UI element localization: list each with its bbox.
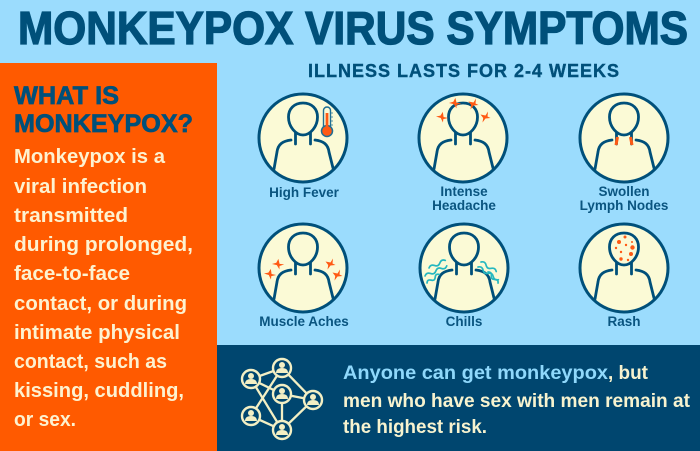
symptom: rash: Rash xyxy=(607,314,641,329)
panel: what is monkeypox xyxy=(0,63,217,451)
panel body text: viral infection xyxy=(14,176,147,198)
panel body text: contact, or during xyxy=(14,293,187,315)
symptom: intense headache: Intense xyxy=(440,184,488,199)
callout text: , but xyxy=(608,363,649,384)
symptom: swollen lymph nodes: Swollen xyxy=(598,184,650,199)
panel body text: during prolonged, xyxy=(14,234,193,256)
panel: risk callout xyxy=(217,345,700,451)
callout text: the highest risk. xyxy=(343,417,487,438)
icon: ache bolts xyxy=(263,258,342,281)
callout text: men who have sex with men remain at xyxy=(343,391,691,412)
symptom: muscle aches: Muscle Aches xyxy=(259,314,349,329)
panel body text: face-to-face xyxy=(14,263,130,285)
panel body text: contact, such as xyxy=(14,351,167,373)
icon: thermometer xyxy=(322,107,333,136)
callout text: Anyone can get monkeypox xyxy=(343,363,608,384)
icon: people network xyxy=(242,359,322,439)
symptom: chills: Chills xyxy=(446,314,482,329)
symptom: intense headache xyxy=(419,94,507,213)
icon: swollen nodes xyxy=(616,137,632,145)
symptom: muscle aches xyxy=(259,224,349,329)
symptom: chills xyxy=(420,224,508,329)
symptom: swollen lymph nodes xyxy=(580,94,668,213)
panel heading: MONKEYPOX? xyxy=(14,110,193,138)
panel body text: Monkeypox is a xyxy=(14,146,166,168)
panel body text: kissing, cuddling, xyxy=(14,380,184,402)
icon: rash spots xyxy=(615,236,635,261)
symptom: high fever xyxy=(259,94,347,200)
panel body text: or sex. xyxy=(14,409,76,431)
symptom: swollen lymph nodes: Lymph Nodes xyxy=(580,198,668,213)
symptom: intense headache: Headache xyxy=(432,198,496,213)
panel body text: transmitted xyxy=(14,205,128,227)
symptom: rash xyxy=(580,224,668,329)
panel heading: WHAT IS xyxy=(14,82,119,110)
icon: head pain bolts xyxy=(435,97,490,124)
icon: cold waves xyxy=(424,259,499,284)
panel body text: intimate physical xyxy=(14,322,180,344)
symptom: high fever: High Fever xyxy=(269,185,340,200)
subheading: ILLNESS LASTS FOR 2-4 WEEKS xyxy=(308,61,619,81)
